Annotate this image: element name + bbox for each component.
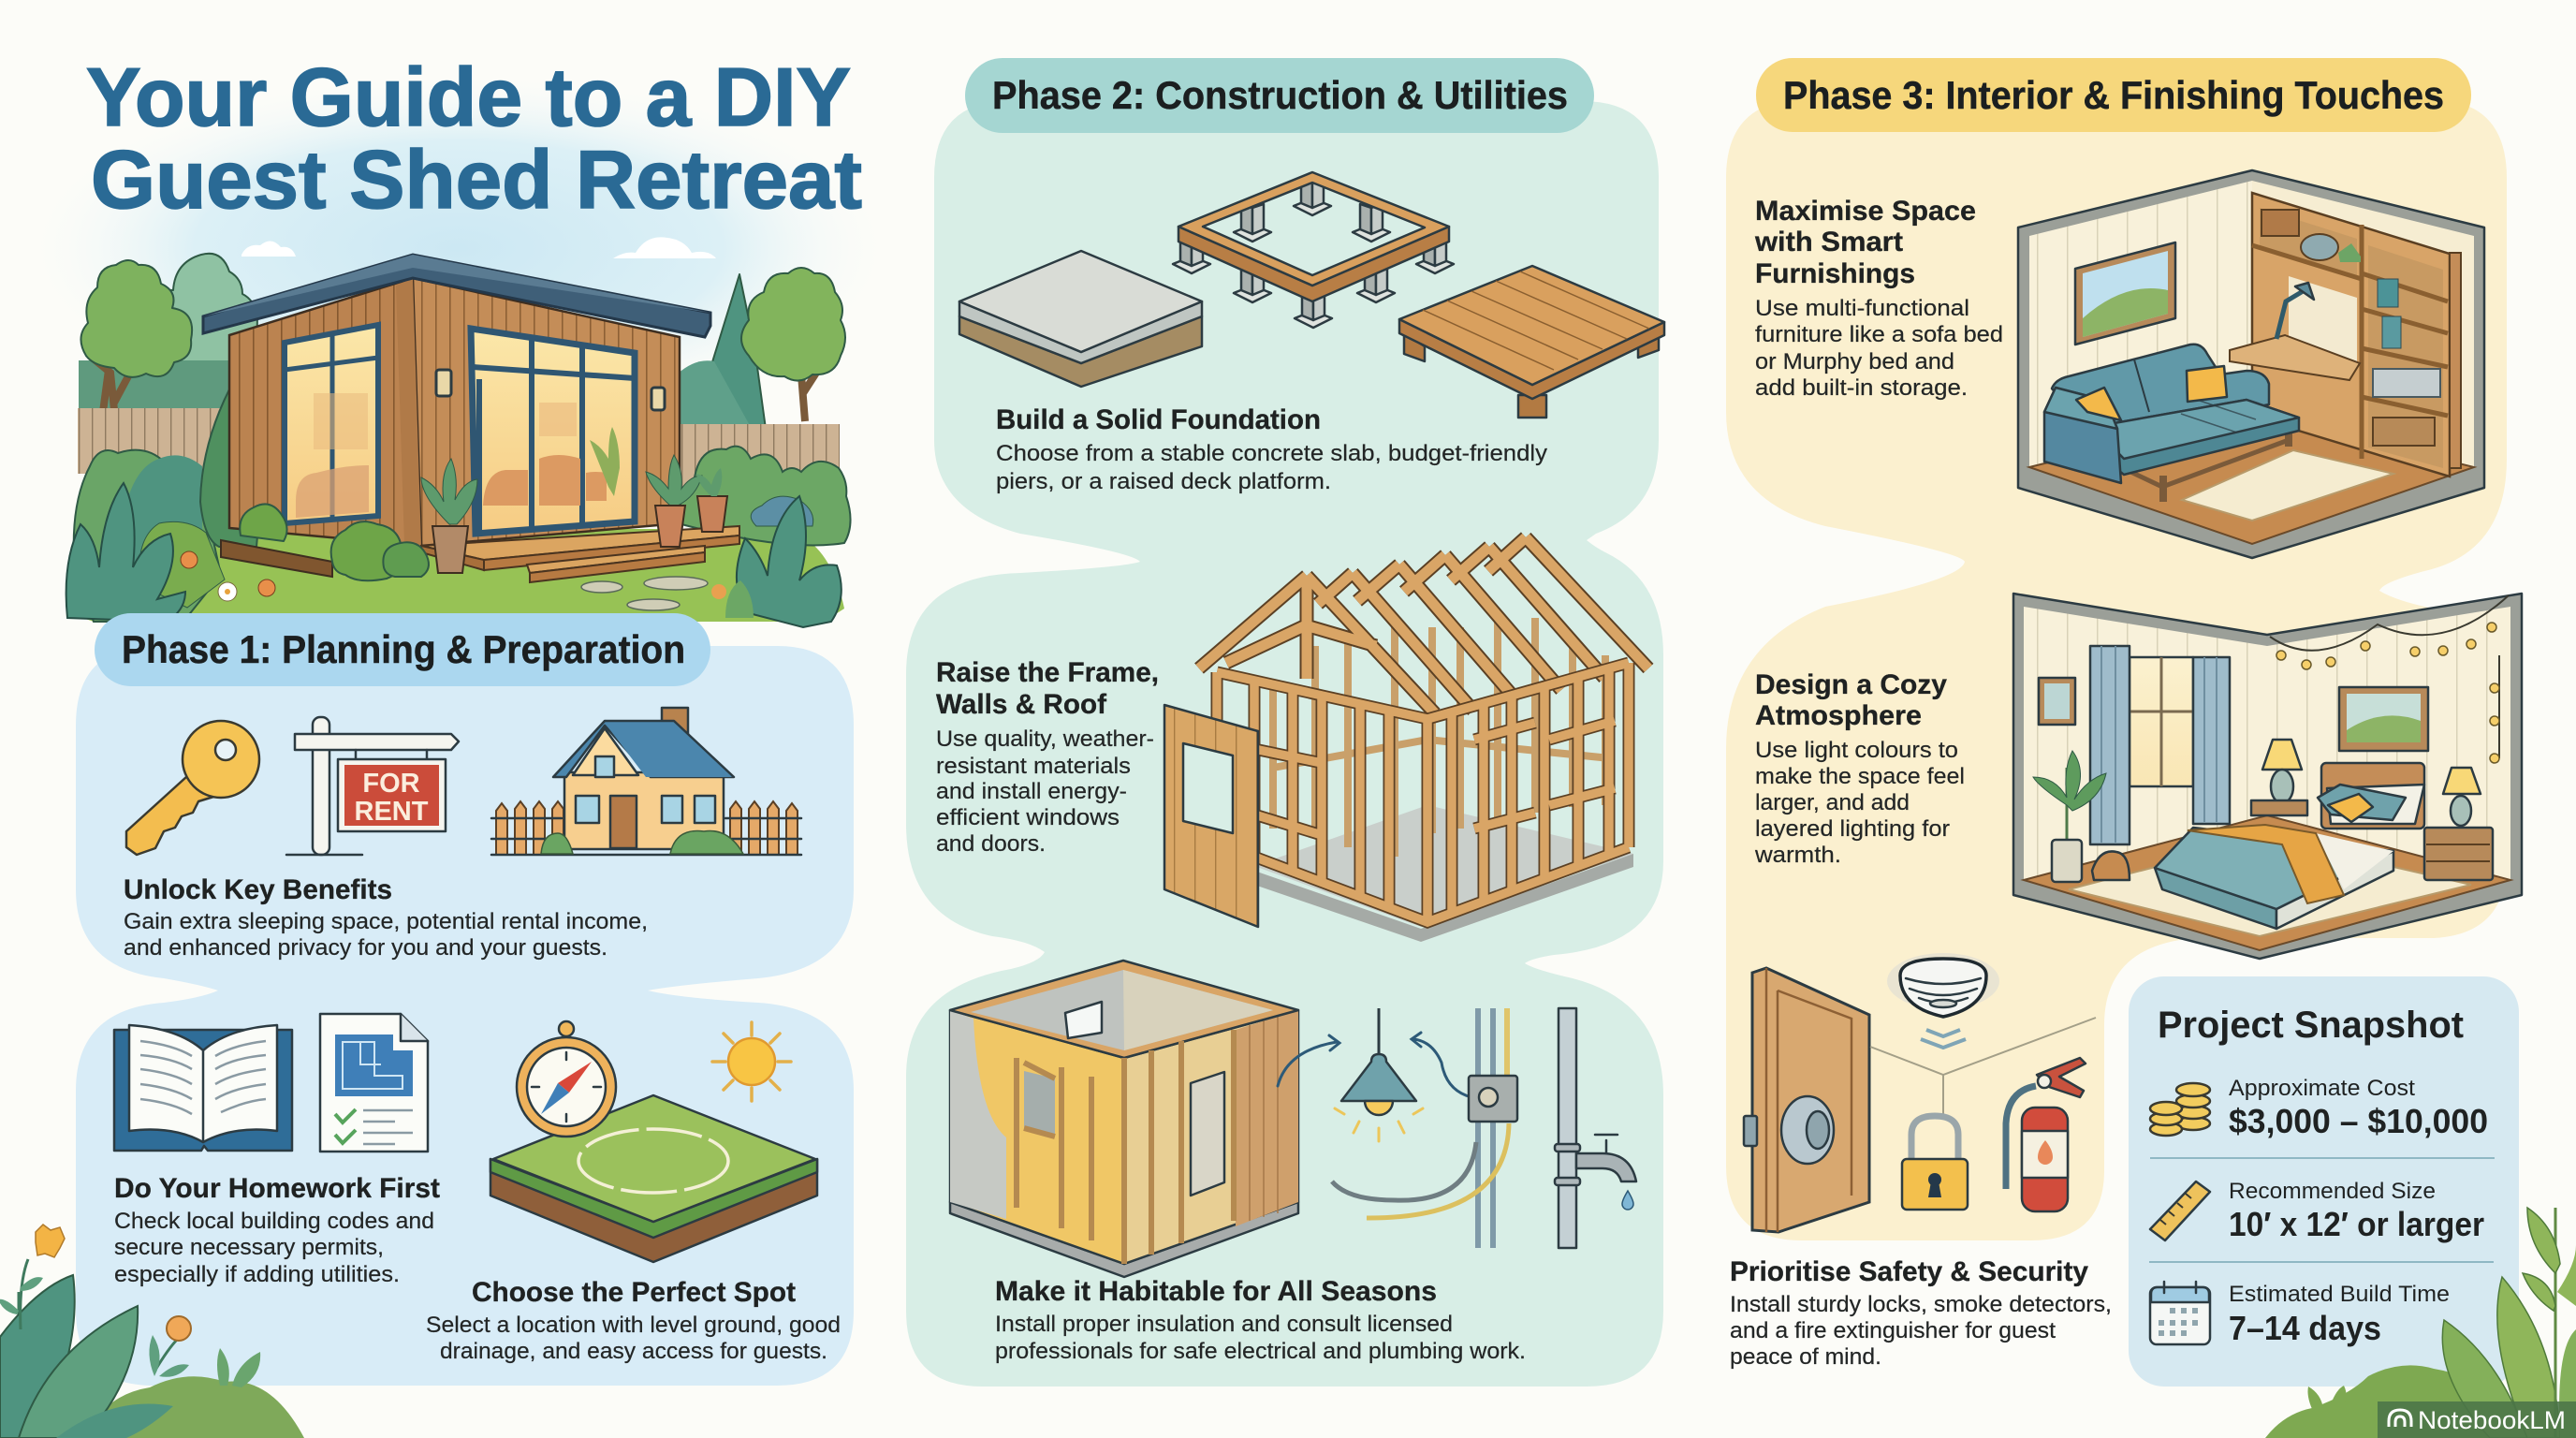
bedside lamps and nightstand <box>2251 740 2493 880</box>
text: maximise space: with Smart <box>1754 227 1903 257</box>
text: make it habitable: professionals for safe electrical and plumbing work. <box>995 1339 1526 1364</box>
icon: ruler <box>2150 1181 2210 1240</box>
wooden deck and step <box>421 526 739 582</box>
stat: recommended size: Recommended Size <box>2229 1179 2436 1204</box>
icon: hanging lamp <box>1335 1008 1423 1141</box>
icon: for rent sign: RENT <box>355 797 429 827</box>
stat: estimated build time: Estimated Build Time <box>2229 1282 2450 1307</box>
text: raise the frame: resistant materials <box>936 754 1131 779</box>
text: choose the perfect spot: drainage, and easy access for guests. <box>440 1339 827 1364</box>
text: prioritise safety and security: peace of mind. <box>1730 1344 1881 1370</box>
panel: phase 3 interior and finishing touches <box>1726 58 2522 1370</box>
text: do your homework first <box>114 1173 440 1287</box>
text: do your homework first: Check local building codes and <box>114 1209 434 1234</box>
shed glass doors <box>471 329 635 534</box>
icon: padlock <box>1902 1116 1968 1210</box>
icon: blueprint and checklist <box>320 1014 428 1152</box>
text: design a cozy atmosphere: Design a Cozy <box>1755 669 1947 700</box>
snapshot heading: Project Snapshot <box>2158 1005 2464 1046</box>
foreground foliage <box>66 483 842 627</box>
text: design a cozy atmosphere: larger, and add <box>1755 790 1910 815</box>
text: raise the frame: efficient windows <box>936 805 1120 830</box>
text: raise the frame: Walls & Roof <box>936 689 1107 720</box>
text: maximise space: add built-in storage. <box>1755 375 1968 401</box>
panel: project snapshot <box>2129 976 2519 1387</box>
icon: for rent sign: FOR <box>362 769 420 799</box>
stat: approximate cost: $3,000 – $10,000 <box>2229 1102 2488 1140</box>
text: make it habitable <box>995 1276 1526 1364</box>
icon: house with fence <box>491 708 801 855</box>
icon: sun <box>712 1022 791 1101</box>
text: maximise space: Maximise Space <box>1755 196 1976 227</box>
text: prioritise safety and security: Prioritise Safety & Security <box>1730 1256 2088 1287</box>
text: raise the frame: and install energy- <box>936 779 1127 804</box>
phase 2 heading pill: Phase 2: Construction & Utilities <box>992 73 1568 117</box>
background glow behind title <box>19 70 899 426</box>
phase 3 heading pill <box>1756 58 2471 132</box>
window with curtains <box>2090 646 2230 844</box>
text: maximise space: furniture like a sofa bed <box>1755 322 2003 347</box>
panel: phase 1 planning and preparation <box>76 613 854 1386</box>
potted plants <box>421 455 727 573</box>
text: build a solid foundation: piers, or a raised deck platform. <box>996 469 1331 494</box>
sofa bed <box>2044 345 2299 502</box>
framed picture over bed <box>2339 687 2428 751</box>
title <box>86 51 862 226</box>
bed <box>2155 763 2424 929</box>
text: maximise space: Furnishings <box>1755 258 1915 289</box>
text: maximise space: or Murphy bed and <box>1755 349 1954 374</box>
stat: estimated build time <box>2229 1282 2450 1347</box>
text: raise the frame: Use quality, weather- <box>936 726 1154 752</box>
phase 3 heading pill: Phase 3: Interior & Finishing Touches <box>1783 73 2444 117</box>
text: design a cozy atmosphere: Use light colours to <box>1755 738 1958 763</box>
text: unlock key benefits <box>124 874 648 961</box>
text: raise the frame: Raise the Frame, <box>936 657 1159 688</box>
text: design a cozy atmosphere: layered lighting for <box>1755 816 1950 842</box>
wall lamps <box>436 370 665 410</box>
title: Your Guide to a DIY <box>86 51 851 143</box>
text: maximise space: Use multi-functional <box>1755 296 1969 321</box>
icon: water pipe and tap <box>1555 1008 1636 1248</box>
illustration: garden shed scene <box>66 237 851 627</box>
shed left window <box>285 325 378 523</box>
decoration: bottom-right plants <box>2265 1208 2576 1438</box>
arrows: power to lamp <box>1278 1033 1471 1097</box>
text: design a cozy atmosphere: make the space feel <box>1755 764 1965 789</box>
bookcase <box>2252 193 2461 477</box>
text: build a solid foundation <box>996 404 1547 494</box>
watermark: NotebookLM: NotebookLM <box>2418 1406 2566 1434</box>
stat: approximate cost <box>2229 1076 2488 1140</box>
text: choose the perfect spot: Choose the Perfect Spot <box>472 1277 796 1308</box>
text: do your homework first: secure necessary permits, <box>114 1235 384 1260</box>
stepping stones <box>581 577 708 610</box>
text: unlock key benefits: Unlock Key Benefits <box>124 874 392 905</box>
stat: approximate cost: Approximate Cost <box>2229 1076 2415 1101</box>
icon: coins <box>2150 1083 2210 1136</box>
icon: compass <box>517 1021 616 1137</box>
icon: fire extinguisher <box>2006 1058 2086 1211</box>
watermark: NotebookLM <box>2378 1401 2576 1438</box>
shed roof <box>203 255 710 337</box>
illustration: insulated room cutaway <box>950 961 1298 1277</box>
text: unlock key benefits: Gain extra sleeping space, potential rental income, <box>124 909 648 934</box>
icon: site block with grass <box>490 1095 817 1262</box>
small framed picture <box>2039 678 2075 725</box>
wall corner lines <box>1870 1018 2096 1115</box>
shed walls <box>229 278 680 546</box>
string lights <box>2270 595 2509 763</box>
text: choose the perfect spot: Select a location with level ground, good <box>426 1313 841 1338</box>
text: choose the perfect spot <box>426 1277 841 1364</box>
raised garden bed and bushes <box>221 504 429 580</box>
text: design a cozy atmosphere <box>1754 669 1965 868</box>
text: prioritise safety and security: Install sturdy locks, smoke detectors, <box>1730 1292 2112 1317</box>
stat: estimated build time: 7–14 days <box>2229 1309 2381 1347</box>
title: Guest Shed Retreat <box>91 133 862 226</box>
text: do your homework first: Do Your Homework First <box>114 1173 440 1204</box>
stat: recommended size: 10′ x 12′ or larger <box>2229 1205 2484 1243</box>
text: raise the frame <box>936 657 1159 857</box>
icon: open book <box>114 1025 292 1151</box>
text: make it habitable: Make it Habitable for All Seasons <box>995 1276 1437 1307</box>
text: prioritise safety and security <box>1730 1256 2112 1370</box>
stat: recommended size <box>2229 1179 2484 1243</box>
text: build a solid foundation: Build a Solid Foundation <box>996 404 1321 435</box>
phase 1 heading pill: Phase 1: Planning & Preparation <box>122 627 685 671</box>
text: raise the frame: and doors. <box>936 831 1046 857</box>
icon: smoke detector <box>1887 953 1999 1048</box>
phase 1 heading pill <box>95 613 710 686</box>
text: build a solid foundation: Choose from a stable concrete slab, budget-friendly <box>996 441 1547 466</box>
text: design a cozy atmosphere: warmth. <box>1754 843 1841 868</box>
text: do your homework first: especially if adding utilities. <box>114 1262 400 1287</box>
illustration: living room with sofa bed <box>2018 170 2484 558</box>
illustration: raised deck platform <box>1399 266 1664 418</box>
icon: for rent sign <box>286 717 459 855</box>
text: prioritise safety and security: and a fire extinguisher for guest <box>1730 1318 2056 1343</box>
illustration: conduit and junction box <box>1332 1008 1517 1248</box>
illustration: concrete slab <box>959 251 1202 387</box>
text: maximise space <box>1754 196 2003 401</box>
desk and lamp <box>2230 283 2360 380</box>
illustration: door with deadbolt <box>1744 968 1869 1232</box>
potted plant and bag <box>2033 751 2130 882</box>
icon: calendar <box>2150 1282 2210 1344</box>
text: unlock key benefits: and enhanced privacy for you and your guests. <box>124 935 607 961</box>
text: design a cozy atmosphere: Atmosphere <box>1755 700 1922 731</box>
framed landscape picture <box>2075 242 2175 345</box>
illustration: cozy bedroom <box>2013 594 2522 959</box>
decoration: bottom-left plants <box>0 1225 304 1438</box>
icon: golden key <box>126 721 259 855</box>
illustration: pier foundation <box>1173 172 1454 328</box>
illustration: wall panel with window <box>1164 705 1258 927</box>
panel: phase 2 construction and utilities <box>906 58 1664 1387</box>
illustration: timber frame <box>1199 537 1648 942</box>
phase 2 heading pill <box>965 58 1594 133</box>
text: make it habitable: Install proper insulation and consult licensed <box>995 1312 1453 1337</box>
